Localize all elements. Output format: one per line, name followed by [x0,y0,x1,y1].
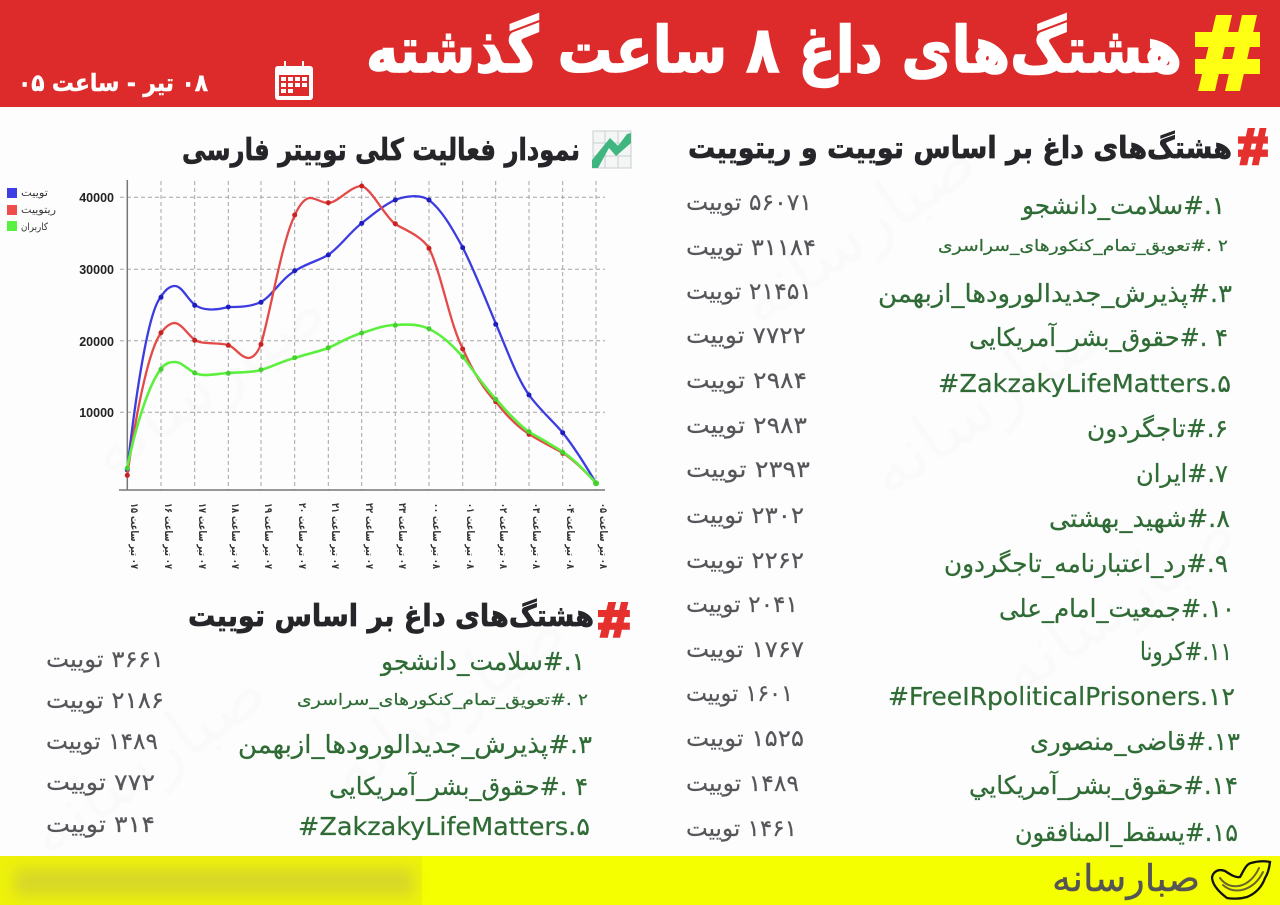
tweet counts: ۲۳۹۳ توییت [686,457,810,483]
x axis labels [128,503,609,569]
tweet counts: ۷۷۲۲ توییت [686,323,806,349]
tweet counts: ۱۴۶۱ توییت [686,816,797,842]
tweet counts: ۲۱۸۶ توییت [46,688,164,714]
x axis labels: ۰۷ تیر ساعت ۲۳ [396,503,408,569]
heading: hashtags by tweet and retweet: هشتگ‌های داغ بر اساس توییت و ریتوییت [688,130,1232,166]
hashtag names: ۶.#تاجگردون [1087,414,1228,444]
hashtag names: ۱.#سلامت_دانشجو [379,647,585,676]
hashtag names [878,191,1240,847]
tweet counts: ۲۰۴۱ توییت [686,592,798,618]
tweet counts: ۲۳۰۲ توییت [686,503,804,529]
heading: hashtags by tweet: هشتگ‌های داغ بر اساس توییت [188,598,594,634]
hashtag names: ۳.#پذیرش_جدیدالورودها_ازبهمن [878,279,1232,309]
x axis labels: ۰۸ تیر ساعت ۰۰ [430,503,442,569]
x axis labels: ۰۷ تیر ساعت ۲۱ [329,503,341,569]
tweet counts: ۲۲۶۲ توییت [686,548,804,574]
footer brand name: صبارسانه [1052,857,1200,900]
panel: tweet ranking [46,647,592,841]
legend: کاربران [21,222,48,233]
x axis labels: ۰۸ تیر ساعت ۰۳ [530,503,542,569]
hashtag names: ۱۰.#جمعیت_امام_علی [999,594,1235,623]
hashtag names: ۱۵.#یسقط_المنافقون [1015,818,1238,847]
y axis labels [79,191,114,420]
tweet counts: ۲۱۴۵۱ توییت [686,279,812,305]
series: retweets [125,184,596,483]
x axis labels: ۰۸ تیر ساعت ۰۱ [464,503,476,569]
hashtag names: ۲ .#تعویق_تمام_کنکورهای_سراسری [938,236,1228,256]
hashtag names: ۱۴.#حقوق_بشر_آمریکایي [969,770,1238,800]
tweet counts [46,647,164,838]
icon: red hash small [598,602,630,638]
hashtag names: ۳.#پذیرش_جدیدالورودها_ازبهمن [238,730,592,760]
y axis labels: 30000 [79,263,114,277]
y axis labels: 40000 [79,191,114,205]
y axis labels: 20000 [79,335,114,349]
x axis labels: ۰۷ تیر ساعت ۲۰ [296,503,308,569]
icon: banana logo [1212,861,1270,899]
x axis labels: ۰۷ تیر ساعت ۱۵ [128,503,140,569]
icon: calendar [275,61,313,100]
x axis labels: ۰۷ تیر ساعت ۱۷ [196,503,208,569]
header band [0,0,1280,107]
x axis labels: ۰۷ تیر ساعت ۲۲ [363,503,375,569]
tweet counts: ۳۱۴ توییت [46,812,155,838]
legend [7,188,56,233]
legend: توییت [21,188,48,199]
icon: yellow hash [1195,15,1260,91]
header date: ۰۸ تیر - ساعت ۰۵ [18,69,208,97]
hashtag names: ۱۳.#قاضی_منصوری [1030,727,1240,756]
tweet counts [686,190,816,842]
icon: trend chart [592,131,631,168]
line chart [7,180,609,569]
tweet counts: ۱۴۸۹ توییت [46,729,158,755]
hashtag names: ۱۲.‎#FreeIRpoliticalPrisoners [888,682,1235,711]
tweet counts: ۱۵۲۵ توییت [686,726,804,752]
hashtag names: ۴ .#حقوق_بشر_آمریکایی [329,771,588,801]
hashtag names: ۷.#ایران [1136,459,1228,488]
tweet counts: ۷۷۲ توییت [46,770,155,796]
heading: chart: نمودار فعالیت کلی توییتر فارسی [182,133,580,168]
x axis labels: ۰۸ تیر ساعت ۰۴ [564,503,576,569]
x axis labels: ۰۸ تیر ساعت ۰۲ [497,503,509,569]
hashtag names: ۹.#رد_اعتبارنامه_تاجگردون [944,549,1228,579]
tweet counts: ۳۶۶۱ توییت [46,647,164,673]
panel: tweet and retweet ranking [686,190,1240,847]
tweet counts: ۲۹۸۴ توییت [686,368,807,394]
hashtag names: ۴ .#حقوق_بشر_آمریکایی [969,322,1228,352]
x axis labels: ۰۸ تیر ساعت ۰۵ [597,503,609,569]
tweet counts: ۱۴۸۹ توییت [686,771,799,797]
tweet counts: ۱۶۰۱ توییت [686,681,793,707]
x axis labels: ۰۷ تیر ساعت ۱۸ [229,503,241,569]
hashtag names: ۱۱.#کرونا [1140,637,1232,667]
tweet counts: ۳۱۱۸۴ توییت [686,235,816,261]
legend: ریتوییت [21,205,56,216]
tweet counts: ۲۹۸۳ توییت [686,413,807,439]
x axis labels: ۰۷ تیر ساعت ۱۶ [162,503,174,569]
tweet counts: ۵۶۰۷۱ توییت [686,190,812,216]
hashtag names: ۵.‎#ZakzakyLifeMatters [938,369,1231,398]
icon: red hash [1238,128,1268,165]
hashtag names: ۵.‎#ZakzakyLifeMatters [298,812,590,841]
series: tweets [125,196,596,483]
tweet counts: ۱۷۶۷ توییت [686,637,804,663]
header title: هشتگ‌های داغ ۸ ساعت گذشته [366,13,1182,88]
blurred footer area [0,856,422,905]
hashtag names: ۱.#سلامت_دانشجو [1020,191,1225,220]
footer band [0,856,1280,905]
x axis labels: ۰۷ تیر ساعت ۱۹ [262,503,274,569]
hashtag names: ۸.#شهید_بهشتی [1049,504,1230,534]
hashtag names [238,647,592,841]
hashtag names: ۲ .#تعویق_تمام_کنکورهای_سراسری [297,690,588,710]
y axis labels: 10000 [79,406,114,420]
series: users [125,323,599,486]
